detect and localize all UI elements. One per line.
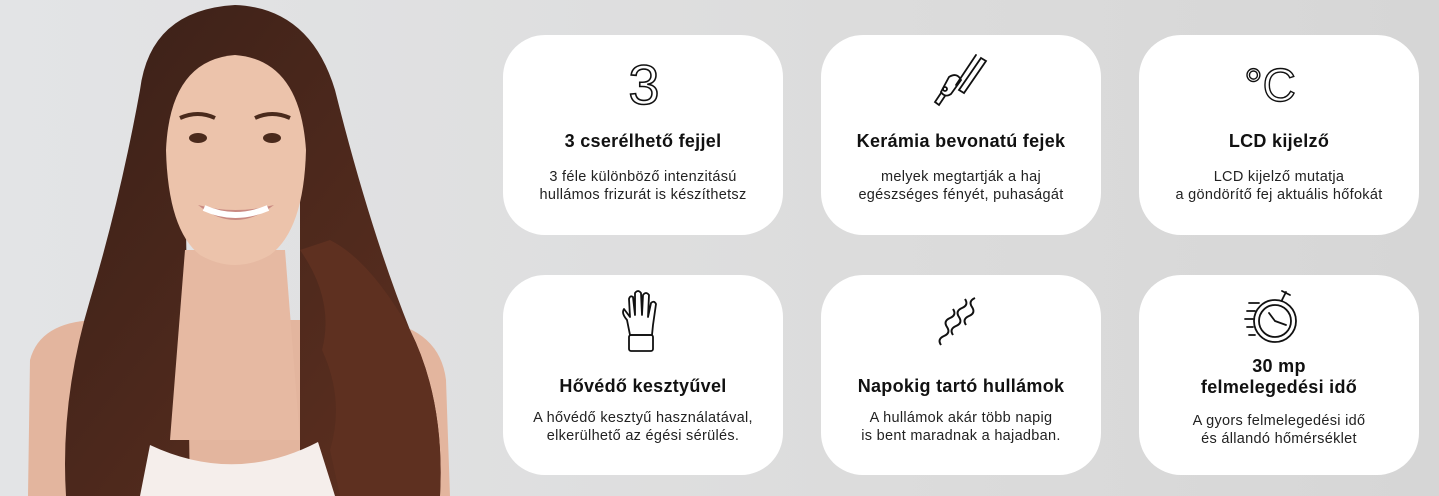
text: hullámos frizurát is készíthetsz (539, 187, 747, 203)
text: 3 féle különböző intenzitású (549, 169, 737, 185)
icon: curling iron (934, 54, 988, 106)
text (1192, 413, 1365, 447)
text (539, 169, 747, 203)
card: LCD display (1139, 35, 1419, 235)
card: 30 s heat-up (1139, 275, 1419, 475)
text: egészséges fényét, puhaságát (858, 187, 1064, 203)
text (1175, 169, 1383, 203)
text: LCD kijelző mutatja (1214, 169, 1344, 185)
text: is bent maradnak a hajadban. (861, 428, 1061, 444)
card: 3 interchangeable heads (503, 35, 783, 235)
heading: felmelegedési idő (1201, 377, 1357, 397)
card: lasting waves (821, 275, 1101, 475)
icon: number 3: 3 (628, 53, 660, 115)
text (533, 410, 753, 444)
text (861, 410, 1061, 444)
text (858, 169, 1064, 203)
heading (1201, 356, 1357, 397)
photo: woman with wavy hair (28, 5, 450, 496)
text: és állandó hőmérséklet (1201, 431, 1357, 447)
icon: waves (938, 297, 976, 346)
text: A gyors felmelegedési idő (1193, 413, 1365, 429)
heading: LCD kijelző (1229, 131, 1329, 151)
text: elkerülhető az égési sérülés. (547, 428, 739, 444)
card: ceramic heads (821, 35, 1101, 235)
heading: 3 cserélhető fejjel (565, 131, 721, 151)
text: A hullámok akár több napig (870, 410, 1052, 426)
heading: Napokig tartó hullámok (858, 376, 1064, 396)
icon: celsius: °C (1244, 59, 1296, 111)
icon: stopwatch (1244, 290, 1297, 343)
heading: 30 mp (1252, 356, 1306, 376)
text: A hővédő kesztyű használatával, (533, 410, 753, 426)
heading: Hővédő kesztyűvel (559, 376, 727, 396)
text: a göndörítő fej aktuális hőfokát (1175, 187, 1383, 203)
card: heat glove (503, 275, 783, 475)
heading: Kerámia bevonatú fejek (857, 131, 1065, 151)
text: melyek megtartják a haj (881, 169, 1041, 185)
icon: glove (622, 290, 657, 352)
